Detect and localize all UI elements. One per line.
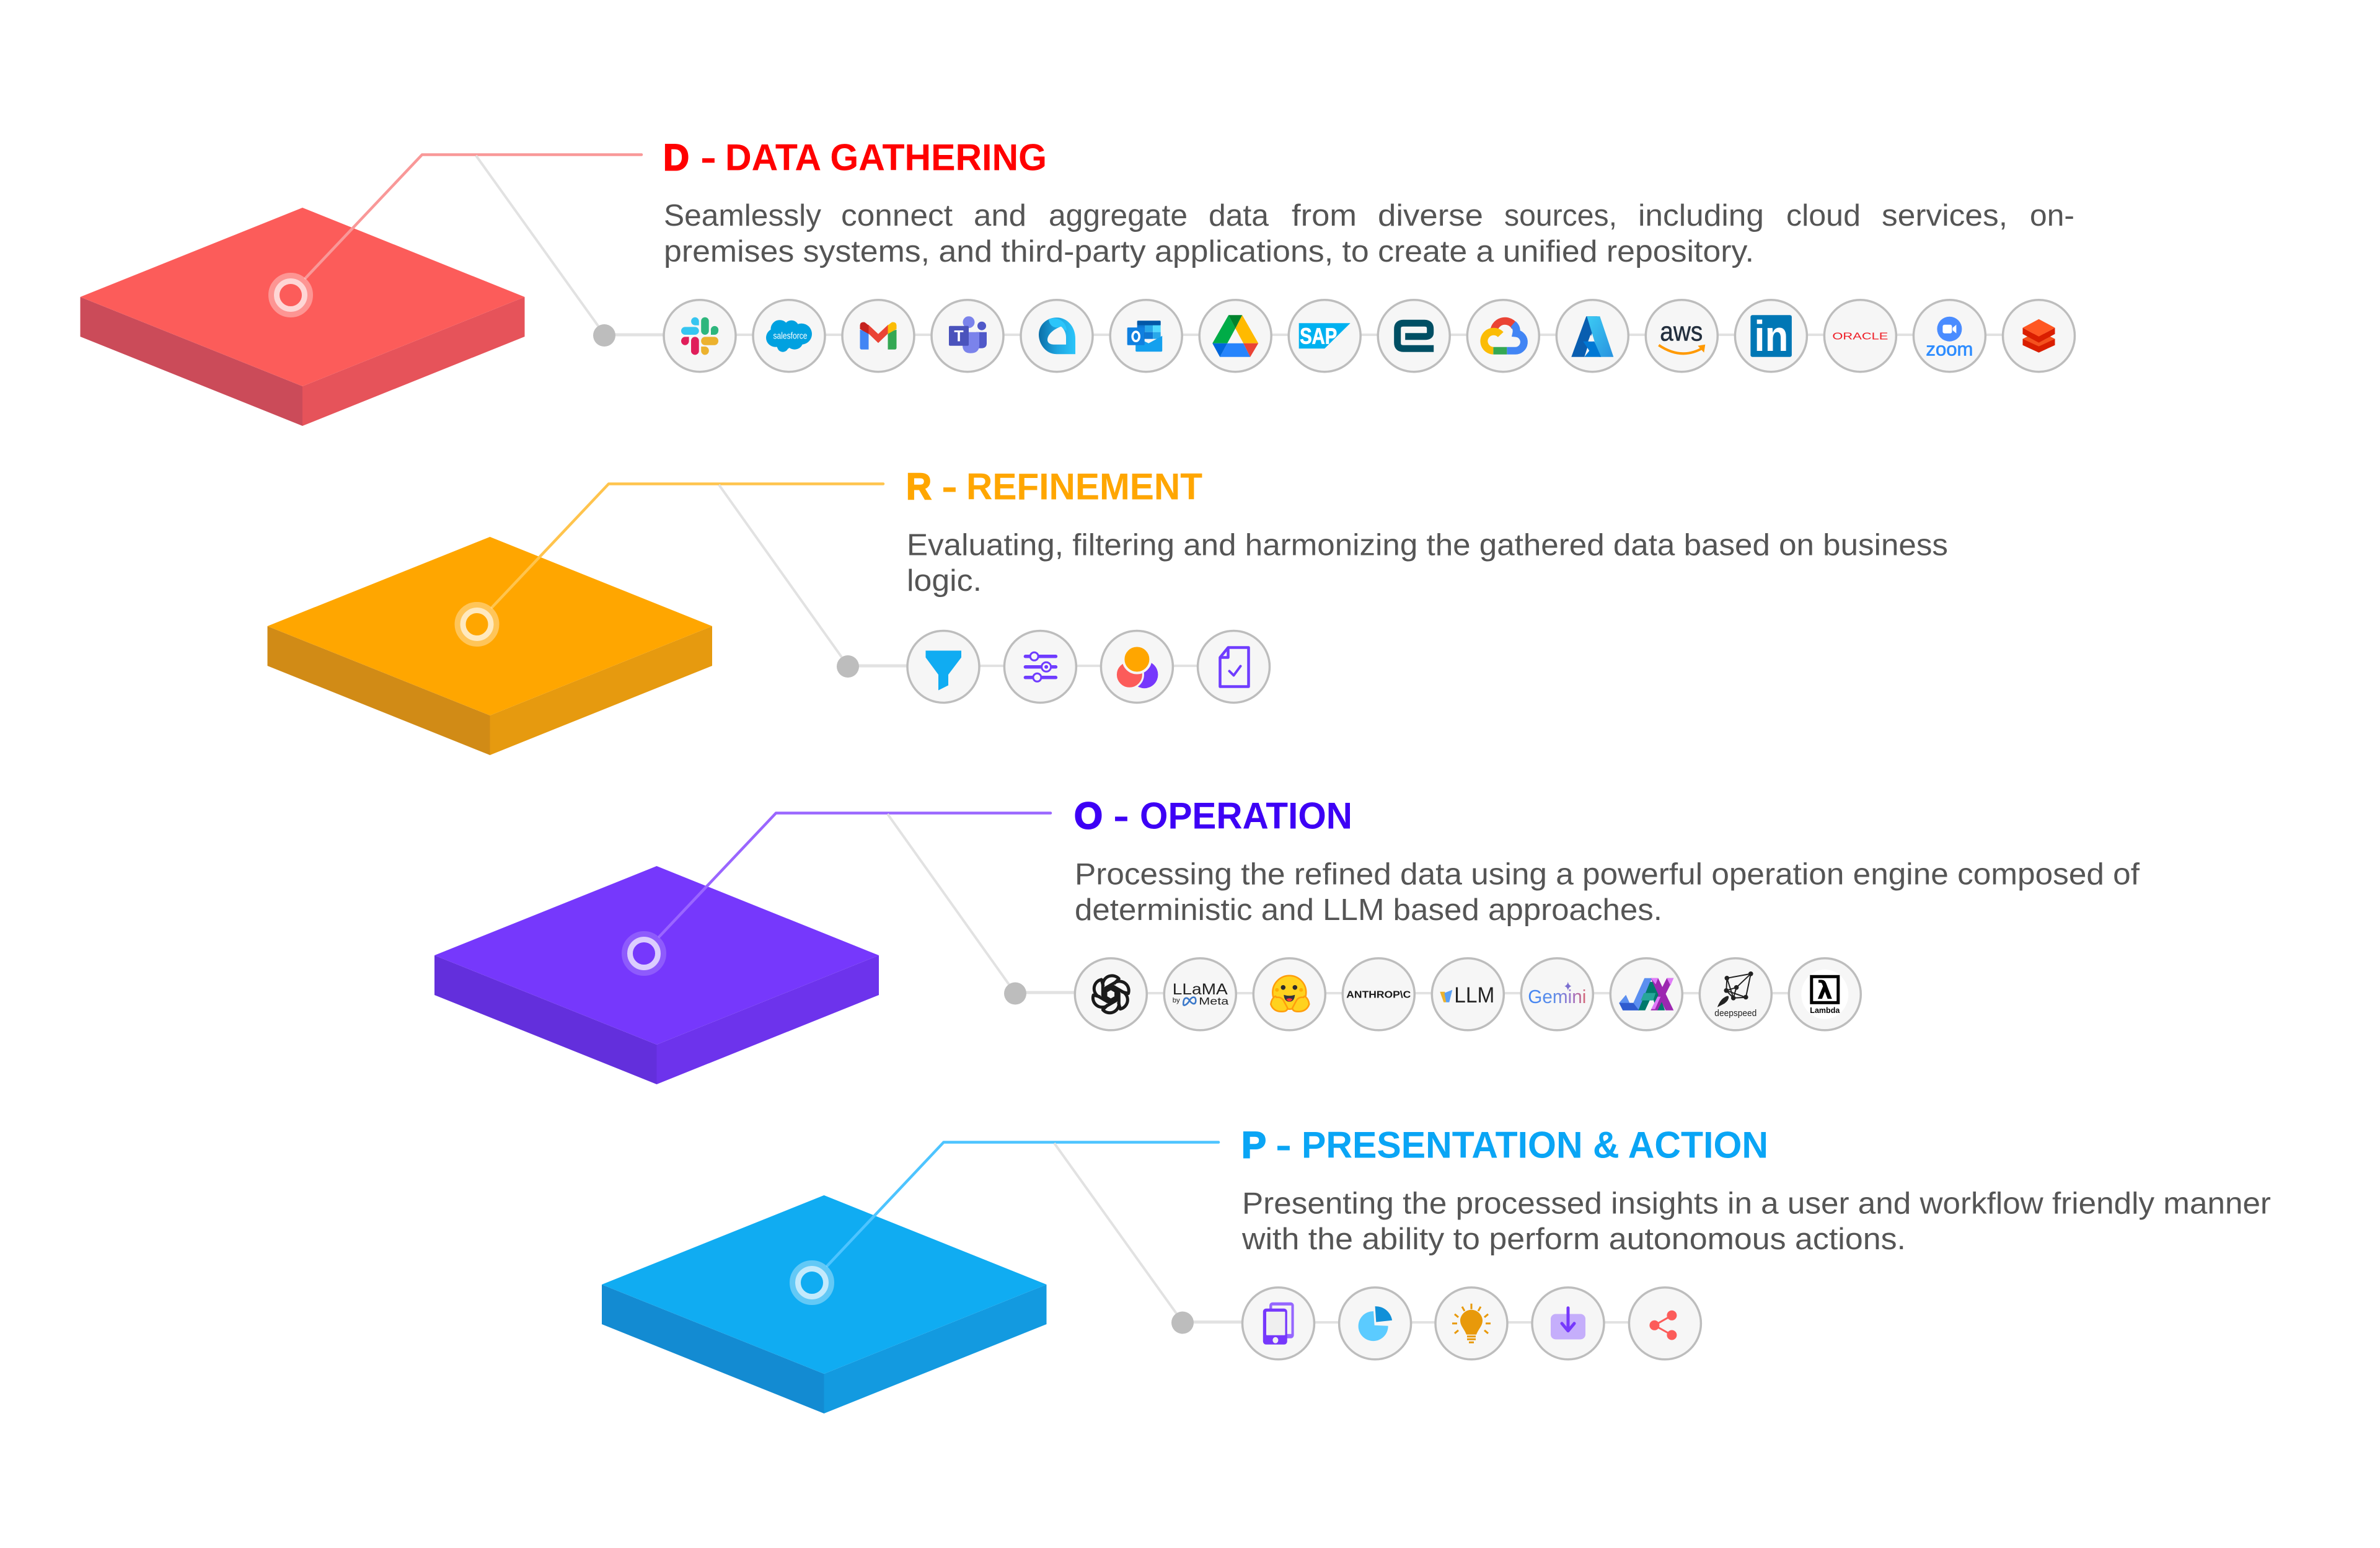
icon: anthropic: [1342, 958, 1414, 1030]
description: O: [1075, 858, 2140, 927]
icon: light bulb: [1435, 1288, 1507, 1360]
icon: azure: [1556, 300, 1628, 372]
icon: microsoft teams: T: [954, 328, 964, 345]
description: D: services,: [1882, 199, 2008, 232]
description: R: Evaluating, filtering and harmonizing the gathered data based on business: [907, 528, 1948, 562]
icon: outlook: [1110, 300, 1182, 372]
heading: P: PRESENTATION & ACTION: [1302, 1125, 1768, 1165]
icon: zoom: [1913, 300, 1985, 372]
connector to tools: D: [476, 156, 2003, 347]
icon: anthropic: ANTHROP\C: [1346, 989, 1411, 1000]
icon: salesforce: salesforce: [774, 332, 807, 342]
icon: gmail: [842, 300, 914, 372]
heading: O: OPERATION: [1140, 795, 1352, 837]
icon: lambda: [1789, 958, 1861, 1030]
leader line and target marker: red: [271, 155, 641, 315]
icon: blue arch logo: [1021, 300, 1093, 372]
icon: deepspeed: deepspeed: [1714, 1008, 1756, 1019]
description: D: connect: [841, 199, 953, 232]
description: D: premises systems, and third-party applications, to create a unified repository.: [664, 235, 1754, 268]
description: D: and: [974, 199, 1026, 232]
icon: linkedin: in: [1754, 312, 1788, 360]
heading: D: -: [700, 136, 716, 179]
panel: O operation: [434, 795, 2140, 1084]
description: O: deterministic and LLM based approaches.: [1075, 893, 1662, 927]
panel: P presentation and action: [602, 1125, 2271, 1413]
icon: llama by meta: Meta: [1199, 996, 1229, 1007]
icon: lambda: Lambda: [1810, 1006, 1840, 1015]
description: D: cloud: [1786, 199, 1861, 232]
connector to tools: O: [888, 814, 1791, 1004]
heading: P: -: [1276, 1125, 1292, 1165]
description: D: sources,: [1504, 199, 1617, 232]
icon: slack: [664, 300, 736, 372]
icon: llama by meta: LLaMA: [1173, 981, 1228, 998]
heading: D: DATA GATHERING: [725, 136, 1047, 179]
description: R: [907, 528, 1948, 598]
icon: aws: aws: [1660, 317, 1703, 347]
icon: hugging face: [1253, 958, 1325, 1030]
description: P: [1241, 1187, 2271, 1256]
icon: sliders: [1004, 631, 1076, 703]
heading: O: O: [1074, 795, 1103, 837]
icon: vllm: [1432, 958, 1504, 1030]
description: P: with the ability to perform autonomous actions.: [1241, 1223, 1906, 1256]
icon: zoom: zoom: [1926, 338, 1973, 360]
icon: gemini: Gemini: [1528, 986, 1586, 1007]
description: D: on-: [2030, 199, 2074, 232]
icon: llama by meta: [1164, 958, 1236, 1030]
icon: document check: [1197, 631, 1269, 703]
heading: R: -: [941, 466, 958, 507]
isometric block: blue: [602, 1195, 1046, 1413]
icon: openai: [1075, 958, 1147, 1030]
icon: linkedin: [1735, 300, 1807, 372]
heading: R: REFINEMENT: [966, 466, 1202, 507]
heading: P: P: [1241, 1125, 1266, 1165]
leader line and target marker: blue: [792, 1142, 1219, 1302]
leader line and target marker: orange: [457, 484, 883, 644]
isometric block: purple: [434, 866, 879, 1084]
icon: gemini: [1521, 958, 1593, 1030]
icon: phones: [1242, 1288, 1314, 1360]
icon: llama by meta: by: [1173, 997, 1180, 1004]
icon: aws: [1646, 300, 1717, 372]
icon: microsoft teams: [932, 300, 1003, 372]
panel: D data gathering: [81, 136, 2075, 426]
heading: D: D: [663, 136, 689, 179]
description: D: from: [1292, 199, 1357, 232]
icon: jax: [1610, 958, 1682, 1030]
leader line and target marker: purple: [625, 813, 1051, 973]
icon: funnel: [907, 631, 979, 703]
icon: share: [1629, 1288, 1701, 1360]
icon: overlapping circles: [1101, 631, 1173, 703]
description: D: data: [1209, 199, 1269, 232]
description: D: Seamlessly: [664, 199, 822, 232]
isometric block: orange: [268, 537, 712, 755]
icon: salesforce: [753, 300, 825, 372]
heading: R: R: [906, 466, 932, 507]
description: D: [664, 199, 2074, 268]
icon: sap: [1289, 300, 1360, 372]
description: D: aggregate: [1049, 199, 1188, 232]
isometric block: red: [81, 208, 524, 426]
icon: oracle: [1824, 300, 1896, 372]
description: D: including: [1638, 199, 1764, 232]
icon: teal e logo: [1378, 300, 1450, 372]
icon: lambda: λ: [1817, 976, 1833, 1005]
heading: O: -: [1113, 795, 1129, 837]
icon: deepspeed: [1699, 958, 1771, 1030]
icon: pie chart: [1339, 1288, 1411, 1360]
description: O: Processing the refined data using a powerful operation engine composed of: [1075, 858, 2140, 891]
description: P: Presenting the processed insights in a user and workflow friendly manner: [1242, 1187, 2271, 1220]
description: D: diverse: [1378, 199, 1483, 232]
panel: R refinement: [268, 466, 1948, 755]
icon: download tray: [1532, 1288, 1604, 1360]
icon: oracle: ORACLE: [1832, 332, 1888, 342]
icon: vllm: LLM: [1454, 983, 1494, 1007]
icon: google cloud: [1467, 300, 1539, 372]
icon: red stacked layers: [2003, 300, 2075, 372]
icon: google drive: [1199, 300, 1271, 372]
icon: sap: SAP: [1300, 324, 1337, 349]
connector to tools: P: [1054, 1143, 1630, 1334]
connector to tools: R: [719, 485, 1197, 678]
description: R: logic.: [907, 564, 982, 598]
